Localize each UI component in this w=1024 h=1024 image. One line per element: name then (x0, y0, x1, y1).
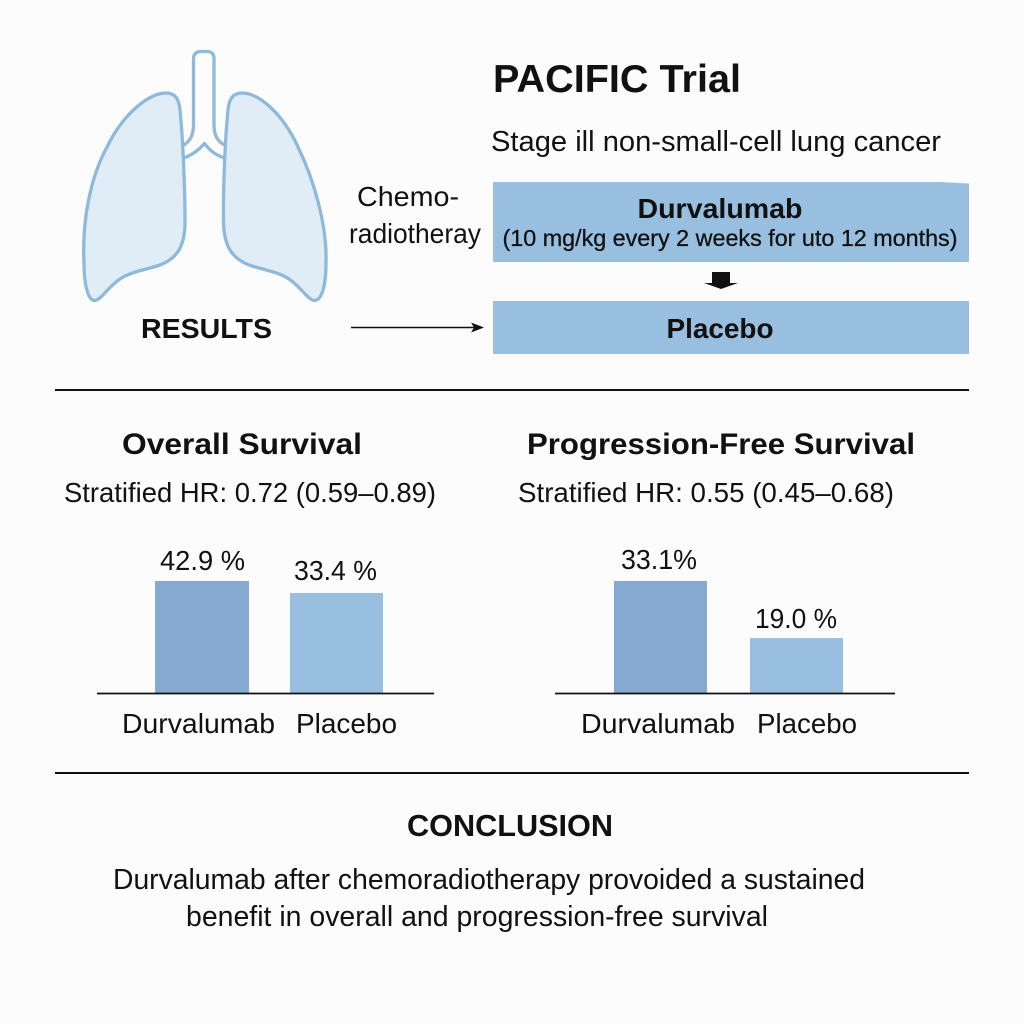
box: placebo arm (493, 301, 969, 354)
bar chart: Durvalumab (581, 708, 735, 739)
label: chemoradiotherapy (349, 181, 481, 249)
heading: Overall Survival (122, 428, 362, 461)
heading: conclusion: CONCLUSION (407, 808, 613, 843)
bar chart: 19.0 % (755, 603, 837, 634)
arrow: durvalumab to placebo (704, 272, 738, 289)
label: chemoradiotherapy: radiotheray (349, 218, 481, 249)
bar chart (97, 545, 434, 739)
panel: progression-free survival (518, 428, 915, 739)
box: durvalumab arm (493, 182, 969, 262)
bar chart: 42.9 % (160, 545, 245, 576)
hazard ratio: Stratified HR: 0.55 (0.45–0.68) (518, 477, 894, 508)
trachea (184, 52, 225, 158)
text: conclusion: benefit in overall and progression-free survival (186, 901, 768, 933)
left lung (84, 93, 185, 301)
hazard ratio: Stratified HR: 0.72 (0.59–0.89) (64, 477, 436, 508)
text: conclusion: Durvalumab after chemoradiotherapy provoided a sustained (113, 864, 865, 896)
box: placebo arm: Placebo (666, 313, 774, 344)
panel: overall survival (64, 428, 436, 739)
label: chemoradiotherapy: Chemo- (357, 181, 459, 212)
bar chart (555, 544, 895, 739)
arrow: results to placebo (351, 322, 484, 332)
title: PACIFIC Trial (493, 58, 741, 101)
bar chart: 33.4 % (294, 555, 377, 586)
icon: lungs (84, 52, 326, 301)
bar chart: Placebo (757, 708, 857, 739)
box: durvalumab arm: Durvalumab (638, 193, 802, 224)
right lung (223, 93, 326, 301)
text: conclusion (113, 864, 865, 933)
bar chart: 33.1% (621, 544, 697, 575)
box: durvalumab arm: (10 mg/kg every 2 weeks for uto 12 months) (502, 225, 958, 251)
bar chart: Placebo (296, 708, 397, 739)
heading: Progression-Free Survival (527, 428, 915, 461)
bar chart: Durvalumab (122, 708, 275, 739)
heading: results: RESULTS (141, 313, 272, 344)
subtitle: Stage ill non-small-cell lung cancer (491, 126, 941, 158)
